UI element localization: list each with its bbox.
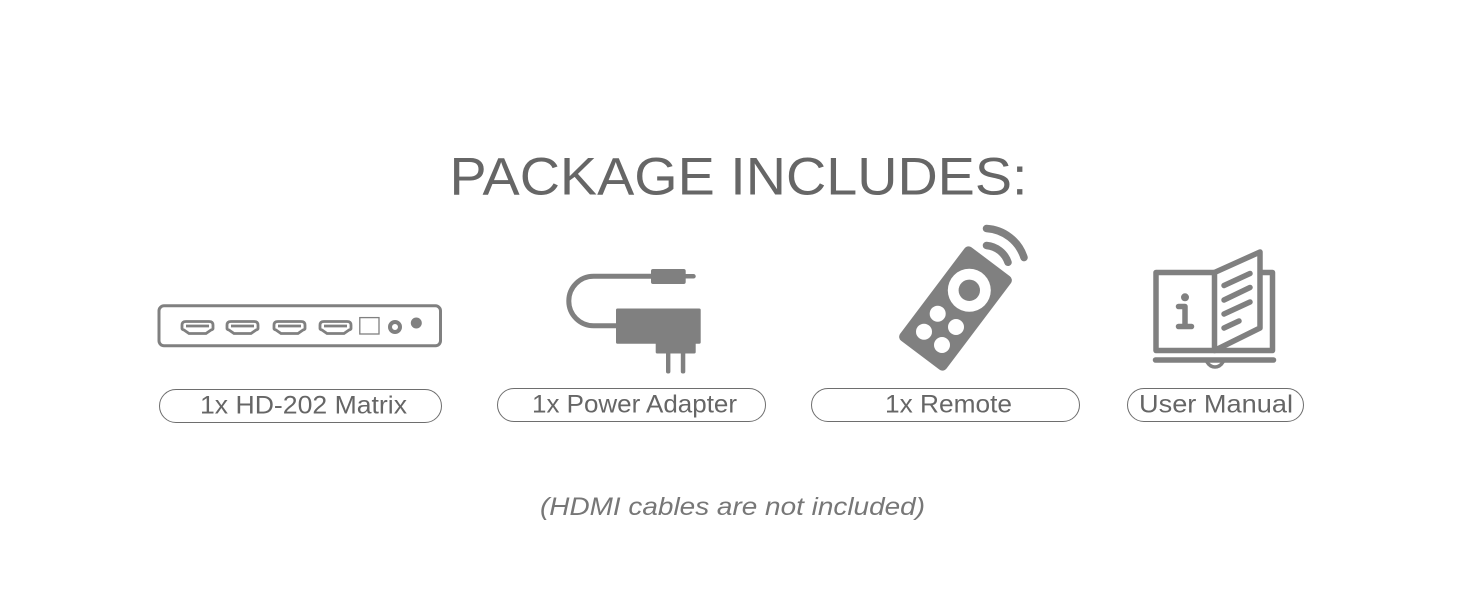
label: 1x Power Adapter [498,388,766,422]
label: 1x Remote [812,388,1080,422]
icon: remote control [897,228,1024,373]
icon: power adapter [569,269,701,374]
footnote: (HDMI cables are not included) [540,493,925,521]
title: PACKAGE INCLUDES: [450,148,1028,206]
panel: HD-202 matrix [159,306,442,422]
label: 1x Remote: 1x Remote [885,390,1012,418]
panel: power adapter [498,269,766,422]
icon: open book [1156,252,1274,367]
label: 1x Power Adapter: 1x Power Adapter [532,390,737,418]
label: User Manual [1128,388,1304,422]
label: 1x HD-202 Matrix [160,390,442,422]
panel: remote [812,228,1080,422]
icon: matrix switch [159,306,440,346]
label: User Manual: User Manual [1139,390,1293,418]
panel: user manual [1128,252,1304,422]
label: 1x HD-202 Matrix: 1x HD-202 Matrix [200,392,408,420]
